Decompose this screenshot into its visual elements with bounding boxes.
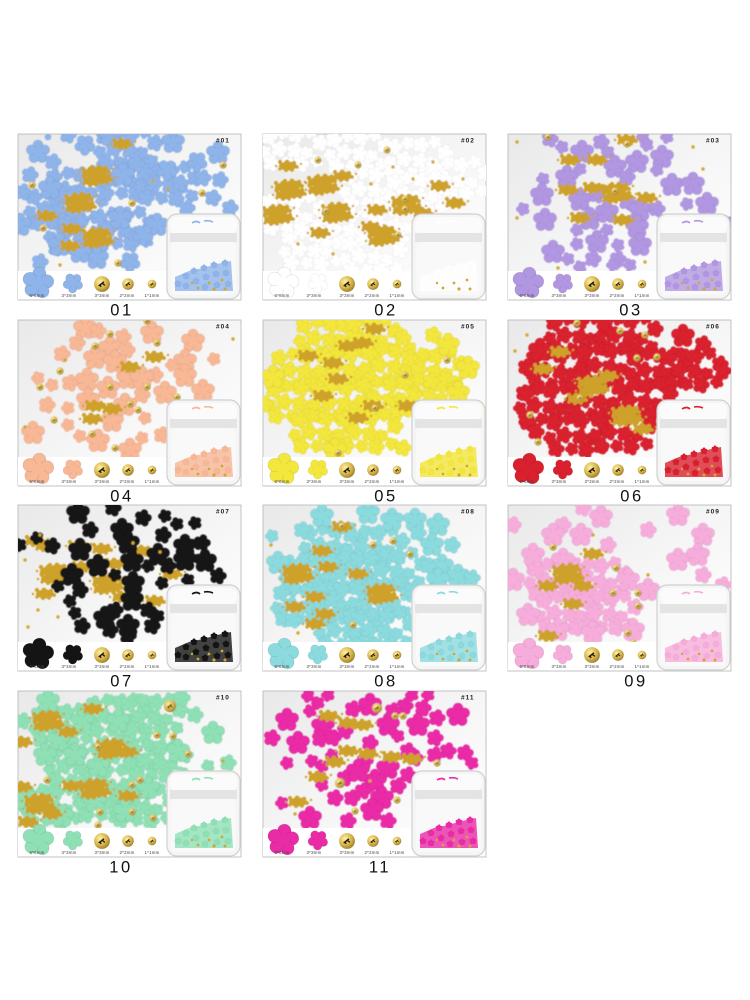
- scatter of flowers and beads 06: [512, 320, 731, 457]
- size legend 11: 3*3mm: [340, 850, 355, 855]
- number label 10: 10: [109, 858, 133, 876]
- size legend 05: 6*6mm: [275, 479, 290, 484]
- size legend 03: 3*3mm: [585, 293, 600, 298]
- size legend 01: 3*3mm: [62, 293, 77, 298]
- packet 10: [167, 771, 240, 856]
- packet 11: [412, 771, 485, 856]
- size legend 07: 1*1mm: [145, 664, 160, 669]
- code tag 09: #09: [706, 508, 720, 516]
- scatter of flowers and beads 02: [263, 134, 486, 271]
- size legend 05: 1*1mm: [390, 479, 405, 484]
- size legend 06: 3*3mm: [552, 479, 567, 484]
- packet 08: [412, 585, 485, 670]
- number label 03: 03: [619, 302, 643, 320]
- size legend 10: 2*2mm: [120, 850, 135, 855]
- size legend 02: 6*6mm: [275, 293, 290, 298]
- size legend 02: 3*3mm: [307, 293, 322, 298]
- size legend 01: 2*2mm: [120, 293, 135, 298]
- scatter of flowers and beads 05: [263, 320, 486, 457]
- size legend 01: [18, 265, 168, 300]
- size legend 10: [18, 822, 168, 856]
- size legend 03: 3*3mm: [552, 293, 567, 298]
- card 02: white flowers: [262, 134, 486, 316]
- card 01: blue flowers: [18, 134, 242, 316]
- size legend 06: 3*3mm: [585, 479, 600, 484]
- card 04: peach flowers: [18, 316, 241, 506]
- card 05: yellow flowers: [262, 320, 486, 502]
- size legend 11: 2*2mm: [365, 850, 380, 855]
- code tag 11: #11: [461, 694, 474, 702]
- number label 08: 08: [374, 672, 398, 690]
- size legend 03: 2*2mm: [610, 293, 625, 298]
- size legend 02: 1*1mm: [390, 293, 405, 298]
- scatter of flowers and beads 09: [508, 505, 731, 642]
- packet 03: [657, 214, 730, 299]
- size legend 08: 1*1mm: [390, 664, 405, 669]
- size legend 09: [508, 636, 658, 670]
- size legend 08: 3*3mm: [307, 664, 322, 669]
- code tag 06: #06: [706, 324, 720, 330]
- size legend 03: 1*1mm: [635, 293, 650, 298]
- code tag 10: #10: [216, 694, 230, 702]
- code tag 04: #04: [216, 324, 230, 330]
- code tag 01: #01: [216, 138, 230, 144]
- size legend 10: 3*3mm: [62, 850, 77, 855]
- size legend 10: 3*3mm: [95, 850, 110, 855]
- size legend 06: 1*1mm: [635, 479, 650, 484]
- size legend 09: 2*2mm: [610, 664, 625, 669]
- size legend 04: 1*1mm: [145, 479, 160, 484]
- scatter of flowers and beads 01: [18, 134, 240, 271]
- size legend 02: [263, 265, 413, 300]
- code tag 08: #08: [461, 508, 475, 516]
- packet 06: [657, 400, 730, 485]
- size legend 07: 3*3mm: [62, 664, 77, 669]
- size legend 02: 3*3mm: [340, 293, 355, 298]
- packet 05: [412, 400, 485, 485]
- card 03: purple flowers: [508, 127, 737, 320]
- packet 04: [167, 400, 240, 485]
- size legend 01: 6*6mm: [30, 293, 45, 298]
- size legend 06: [508, 451, 658, 486]
- size legend 05: 3*3mm: [340, 479, 355, 484]
- scatter of flowers and beads 03: [514, 134, 731, 271]
- card 08: aqua flowers: [263, 501, 486, 690]
- size legend 01: 1*1mm: [145, 293, 160, 298]
- size legend 11: 3*3mm: [307, 850, 322, 855]
- scatter of flowers and beads 08: [264, 505, 482, 642]
- number label 11: 11: [369, 858, 391, 876]
- size legend 08: [263, 636, 413, 670]
- packet 01: [167, 214, 240, 299]
- size legend 07: 2*2mm: [120, 664, 135, 669]
- size legend 09: 3*3mm: [552, 664, 567, 669]
- scatter of flowers and beads 07: [18, 505, 228, 642]
- packet 02: [412, 214, 485, 299]
- size legend 04: 3*3mm: [95, 479, 110, 484]
- size legend 07: 3*3mm: [95, 664, 110, 669]
- size legend 06: 2*2mm: [610, 479, 625, 484]
- size legend 04: 3*3mm: [62, 479, 77, 484]
- code tag 02: #02: [461, 138, 475, 144]
- size legend 09: 6*6mm: [520, 664, 535, 669]
- size legend 11: 6*6mm: [275, 850, 290, 855]
- size legend 05: 2*2mm: [365, 479, 380, 484]
- size legend 10: 1*1mm: [145, 850, 160, 855]
- number label 01: 01: [110, 302, 134, 320]
- size legend 11: 1*1mm: [390, 850, 405, 855]
- size legend 09: 3*3mm: [585, 664, 600, 669]
- scatter of flowers and beads 04: [21, 316, 235, 461]
- card 09: pink flowers: [501, 497, 733, 690]
- size legend 01: 3*3mm: [95, 293, 110, 298]
- code tag 07: #07: [216, 508, 230, 516]
- card 11: magenta flowers: [262, 685, 486, 876]
- number label 02: 02: [374, 302, 398, 320]
- card 06: red flowers: [508, 308, 733, 506]
- size legend 06: 6*6mm: [520, 479, 535, 484]
- size legend 05: [263, 451, 413, 486]
- size legend 07: 6*6mm: [30, 664, 45, 669]
- size legend 04: [18, 451, 168, 486]
- scatter of flowers and beads 10: [9, 687, 238, 831]
- number label 05: 05: [374, 488, 398, 506]
- card 07: black flowers: [11, 497, 241, 690]
- size legend 11: [263, 822, 413, 856]
- size legend 04: 6*6mm: [30, 479, 45, 484]
- number label 06: 06: [620, 488, 644, 506]
- size legend 07: [18, 636, 168, 670]
- code tag 03: #03: [706, 138, 720, 144]
- code tag 05: #05: [461, 324, 475, 330]
- size legend 10: 6*6mm: [30, 850, 45, 855]
- number label 09: 09: [624, 672, 648, 690]
- card 10: mint flowers: [9, 687, 241, 876]
- size legend 08: 2*2mm: [365, 664, 380, 669]
- size legend 09: 1*1mm: [635, 664, 650, 669]
- scatter of flowers and beads 11: [262, 685, 482, 831]
- packet 09: [657, 585, 730, 670]
- number label 07: 07: [110, 672, 134, 690]
- size legend 08: 6*6mm: [275, 664, 290, 669]
- number label 04: 04: [110, 488, 134, 506]
- size legend 03: 6*6mm: [520, 293, 535, 298]
- size legend 02: 2*2mm: [365, 293, 380, 298]
- size legend 08: 3*3mm: [340, 664, 355, 669]
- size legend 04: 2*2mm: [120, 479, 135, 484]
- size legend 05: 3*3mm: [307, 479, 322, 484]
- packet 07: [167, 585, 240, 670]
- size legend 03: [508, 265, 658, 300]
